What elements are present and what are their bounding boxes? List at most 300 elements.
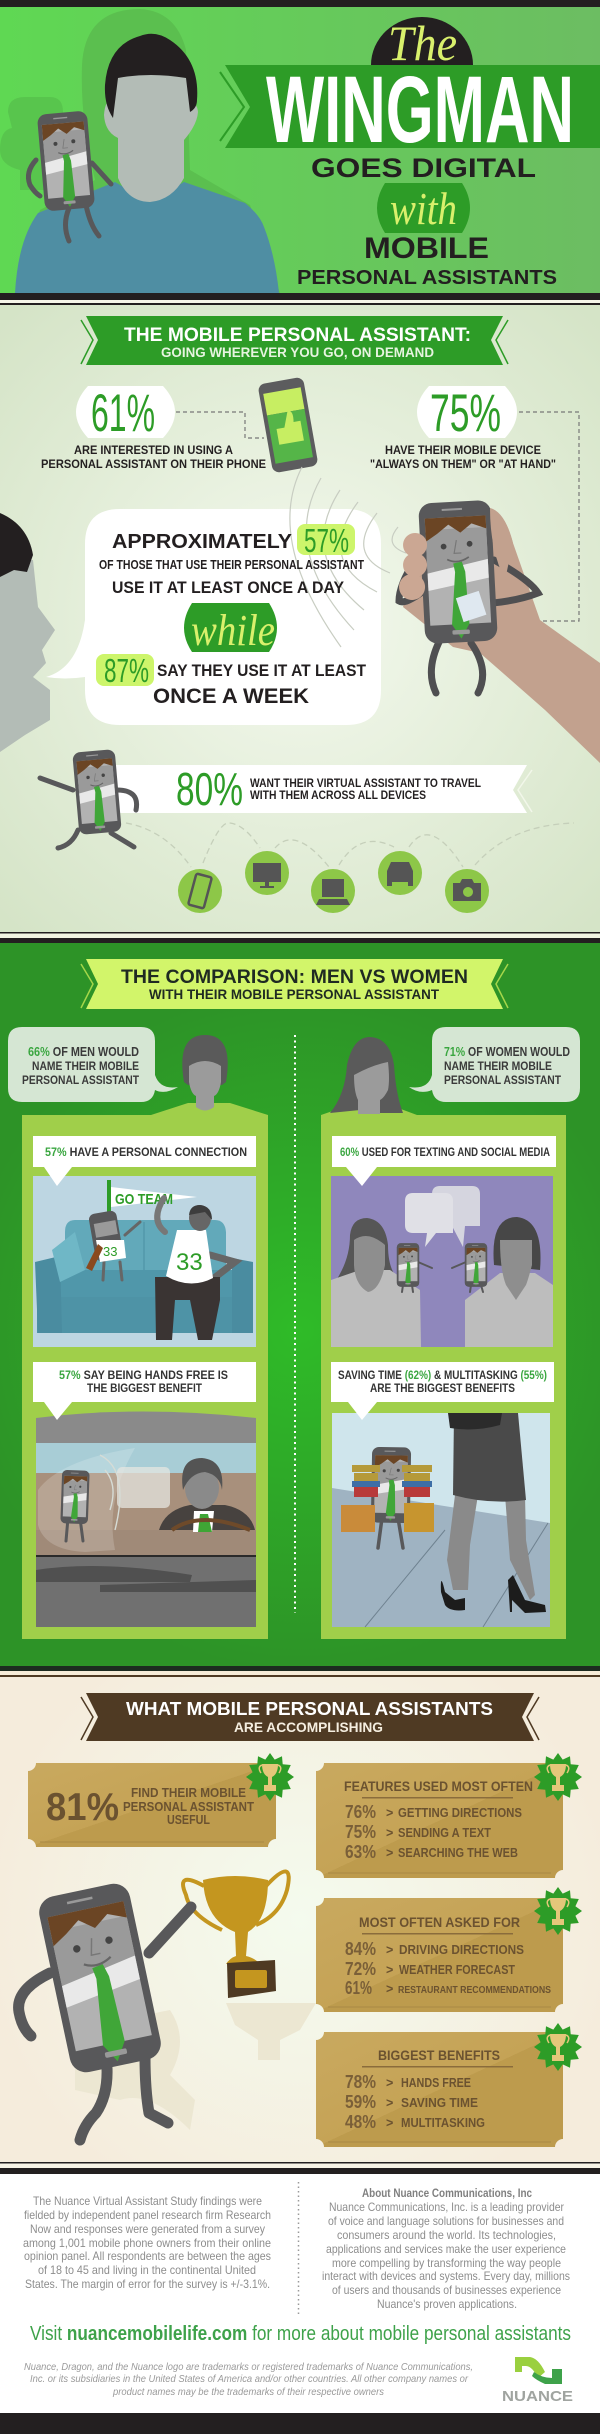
weather forecast: WEATHER FORECAST	[399, 1963, 515, 1977]
subheading: GOING WHEREVER YOU GO, ON DEMAND	[161, 344, 434, 360]
callout: texting	[332, 1136, 556, 1167]
couch back	[65, 1220, 226, 1275]
fingers	[399, 533, 427, 600]
pointer	[44, 1167, 72, 1186]
box	[332, 1136, 556, 1167]
pennant	[107, 1180, 197, 1215]
badge	[534, 2023, 582, 2071]
text: interested in assistant	[41, 443, 266, 471]
plaque: most often asked for	[316, 1887, 582, 2012]
dark stripe	[0, 1666, 600, 1671]
71% line: 71% OF WOMEN WOULD	[444, 1045, 570, 1059]
while pill	[184, 603, 277, 652]
bubble text	[22, 1045, 140, 1087]
pointer	[348, 1402, 377, 1420]
line 6: interact with devices and systems. Every day, millions	[322, 2269, 570, 2283]
approximately: APPROXIMATELY	[112, 531, 293, 553]
underline	[362, 1933, 513, 1934]
line 1: ARE INTERESTED IN USING A	[74, 443, 233, 457]
base plate	[235, 1970, 267, 1988]
notepad	[456, 591, 486, 622]
face	[354, 1236, 385, 1292]
driving directions: DRIVING DIRECTIONS	[399, 1943, 524, 1957]
driver suit	[159, 1505, 255, 1530]
title: BIGGEST BENEFITS	[378, 2047, 500, 2063]
line 5: opinion panel. All respondents are between the ages	[24, 2249, 271, 2263]
chevron: >	[386, 1943, 393, 1957]
line 2: WITH THEM ACROSS ALL DEVICES	[250, 788, 426, 802]
legs	[447, 1495, 535, 1600]
underline	[362, 1797, 513, 1798]
front bubble	[405, 1193, 453, 1247]
phone casing	[258, 377, 318, 473]
limbs	[399, 560, 538, 693]
footer divider	[298, 2182, 300, 2315]
heading: WHAT MOBILE PERSONAL ASSISTANTS	[126, 1698, 493, 1719]
brown stripe	[0, 1675, 600, 1677]
pointer	[346, 1167, 377, 1186]
head	[189, 1205, 211, 1231]
panel background	[22, 1103, 268, 1639]
steering wheel	[172, 1520, 250, 1530]
line 2: PERSONAL ASSISTANT	[123, 1800, 254, 1814]
heading banner	[86, 1693, 534, 1741]
box	[33, 1136, 256, 1167]
heading banner	[86, 316, 503, 365]
stat 61%: 61%	[91, 384, 155, 443]
plaque shape	[316, 2032, 563, 2147]
left books red	[354, 1487, 378, 1497]
face and neck	[354, 1062, 389, 1114]
heading chevrons	[81, 1697, 539, 1740]
jersey	[166, 1230, 213, 1284]
line 1: The Nuance Virtual Assistant Study findings were	[33, 2194, 262, 2208]
base	[227, 1960, 276, 1998]
badge	[246, 1753, 294, 1801]
phone	[60, 1470, 90, 1524]
number: 33	[176, 1249, 203, 1276]
glyph	[253, 863, 281, 888]
shoulder phone character	[28, 111, 111, 241]
speech bubble	[46, 509, 381, 725]
head in profile	[0, 513, 55, 752]
title: mobile: MOBILE	[364, 232, 489, 265]
hair	[330, 1037, 403, 1113]
box	[33, 1362, 256, 1402]
limbs	[103, 1222, 140, 1280]
title: FEATURES USED MOST OFTEN	[344, 1778, 533, 1794]
plaque inner line	[40, 1841, 264, 1843]
title: personal assistants: PERSONAL ASSISTANTS	[297, 267, 557, 289]
line 1: WANT THEIR VIRTUAL ASSISTANT TO TRAVEL	[250, 776, 481, 790]
woman legs	[441, 1413, 546, 1613]
line 1: HAVE THEIR MOBILE DEVICE	[385, 443, 541, 457]
hair	[0, 513, 33, 577]
line 2: NAME THEIR MOBILE	[32, 1059, 139, 1073]
cup	[203, 1876, 268, 1964]
icon: camera	[445, 869, 489, 913]
arm and palm	[403, 508, 600, 763]
87%: 87%	[104, 652, 149, 689]
line 4: among 1,001 mobile phone owners from their online	[23, 2236, 271, 2250]
left arm	[35, 1256, 62, 1333]
ribbon chevron	[518, 770, 532, 812]
left books blue and red	[352, 1481, 380, 1487]
line 3: Now and responses were generated from a survey	[30, 2222, 265, 2236]
75%: 75%	[345, 1822, 376, 1842]
with pill	[377, 183, 470, 233]
plaque shape	[316, 1898, 563, 2012]
label: GO TEAM	[115, 1191, 173, 1208]
plaque shape	[28, 1763, 276, 1847]
glyph	[316, 879, 350, 905]
line 2: ARE THE BIGGEST BENEFITS	[370, 1381, 515, 1395]
section background	[0, 1677, 600, 2163]
line 2: of voice and language solutions for businesses and	[328, 2214, 564, 2228]
phone shadow	[0, 97, 63, 190]
pole	[107, 1180, 111, 1215]
big phone character	[19, 1881, 191, 2140]
line 3: PERSONAL ASSISTANT	[444, 1073, 562, 1087]
dash detail	[36, 1566, 256, 1592]
signal glow	[38, 1448, 135, 1552]
hair	[182, 1035, 228, 1085]
illustration: couch scene	[33, 1167, 256, 1347]
stat 61% badge	[76, 386, 175, 438]
upper divider cream	[0, 300, 600, 303]
hair	[105, 34, 197, 118]
about text	[322, 2186, 570, 2311]
phone body	[72, 749, 122, 835]
badge	[534, 1887, 582, 1935]
wordmark: NUANCE	[502, 2388, 573, 2405]
line 1: 57% SAY BEING HANDS FREE IS	[59, 1368, 228, 1382]
plaque: 81% useful	[28, 1753, 294, 1847]
plaque inner line	[328, 2141, 551, 2143]
line 2: THE BIGGEST BENEFIT	[87, 1381, 203, 1395]
upper divider bands	[0, 293, 600, 305]
line 3: product names may be the trademarks of their respective owners	[112, 2386, 385, 2398]
chevron: >	[386, 2116, 393, 2130]
line 7: of users and thousands of businesses experience	[332, 2283, 561, 2297]
chevron: >	[386, 1982, 393, 1996]
84%: 84%	[345, 1939, 376, 1959]
left heel	[441, 1581, 465, 1610]
saving time: SAVING TIME	[401, 2096, 478, 2110]
trophy	[183, 1871, 289, 1998]
glyph	[188, 873, 212, 909]
heading chevrons	[81, 320, 508, 364]
phone top	[88, 1210, 124, 1262]
pavement	[332, 1488, 550, 1627]
sound waves	[290, 467, 406, 647]
trademark text	[24, 2361, 473, 2398]
background	[331, 1176, 553, 1347]
text: 57% HAVE A PERSONAL CONNECTION	[45, 1145, 247, 1159]
limbs	[40, 778, 137, 848]
right heel	[508, 1575, 546, 1613]
section: what assistants are accomplishing	[0, 1666, 600, 2163]
sending a text: SENDING A TEXT	[398, 1826, 491, 1840]
stat 80%: 80%	[176, 763, 243, 815]
body	[465, 1273, 553, 1347]
phone	[371, 1447, 411, 1523]
chevron: >	[386, 1963, 393, 1977]
lower stripes of previous section	[0, 932, 600, 943]
right books	[402, 1465, 432, 1481]
couch front	[37, 1297, 251, 1333]
panel background	[321, 1105, 566, 1639]
76%: 76%	[345, 1802, 376, 1822]
title: The: The	[388, 15, 457, 71]
line 4: applications and services make the user experience	[326, 2242, 566, 2256]
number: 33	[103, 1244, 117, 1259]
legs	[378, 1518, 403, 1548]
searching the web: SEARCHING THE WEB	[398, 1846, 518, 1860]
thumb	[274, 409, 304, 445]
illustration: shopping	[332, 1402, 550, 1627]
shadow of character and trophy	[75, 2003, 316, 2130]
phone	[397, 1243, 419, 1287]
legs	[66, 1518, 83, 1541]
right arm	[232, 1258, 253, 1333]
thumb tip	[490, 508, 513, 580]
plaque: biggest benefits	[316, 2023, 582, 2147]
connector dashes	[176, 412, 579, 621]
icon: thumbs up phone	[258, 377, 318, 473]
left books	[352, 1465, 380, 1481]
of those: OF THOSE THAT USE THEIR PERSONAL ASSISTANT	[99, 558, 364, 572]
running phone character	[40, 749, 137, 848]
hair	[189, 1205, 212, 1220]
line 3: USEFUL	[167, 1813, 210, 1827]
study text	[23, 2194, 271, 2291]
78%: 78%	[345, 2072, 376, 2092]
stat 75%: 75%	[430, 384, 501, 443]
bubble text	[444, 1045, 570, 1087]
limbs	[452, 1262, 483, 1292]
roof	[36, 1412, 256, 1445]
man shadow	[15, 9, 280, 293]
pavement lines	[365, 1523, 548, 1627]
plaque shape	[316, 1763, 563, 1878]
raised arm	[157, 1198, 165, 1232]
driver face	[185, 1467, 219, 1509]
hair	[335, 1218, 395, 1282]
59%: 59%	[345, 2092, 376, 2112]
line 6: of 18 to 45 and living in the continental United	[38, 2263, 256, 2277]
61%: 61%	[345, 1978, 372, 1998]
left bag	[341, 1505, 375, 1532]
phone body	[36, 1881, 164, 2075]
left phone	[397, 1243, 432, 1292]
plaque: features used most often	[316, 1753, 582, 1878]
pants	[155, 1277, 220, 1340]
phone body	[37, 111, 95, 211]
green screen	[267, 409, 313, 464]
hair	[493, 1217, 541, 1270]
right bag	[404, 1503, 434, 1532]
panel: women	[321, 1027, 580, 1639]
phone assistant	[60, 1470, 90, 1541]
line 3: consumers around the world. Its technologies,	[337, 2228, 556, 2242]
chevron: >	[386, 1846, 393, 1860]
dash line	[36, 1555, 256, 1557]
face	[94, 1220, 118, 1238]
lime screen top	[263, 387, 304, 415]
say they use: SAY THEY USE IT AT LEAST	[157, 661, 367, 680]
66% line: 66% OF MEN WOULD	[28, 1045, 139, 1059]
line 7: States. The margin of error for the survey is +/-3.1%.	[25, 2277, 270, 2291]
once a week: ONCE A WEEK	[153, 685, 309, 708]
title: MOST OFTEN ASKED FOR	[359, 1914, 520, 1930]
text: 60% USED FOR TEXTING AND SOCIAL MEDIA	[340, 1145, 550, 1159]
circle	[311, 869, 355, 913]
limbs	[402, 1262, 432, 1292]
callout: saving time	[331, 1362, 554, 1402]
subheading: WITH THEIR MOBILE PERSONAL ASSISTANT	[149, 986, 439, 1002]
seats	[36, 1473, 256, 1533]
right arm	[205, 1255, 235, 1285]
windshield	[36, 1443, 256, 1478]
while: while	[191, 606, 275, 655]
line 1: FIND THEIR MOBILE	[131, 1786, 246, 1800]
section: hero	[0, 0, 600, 293]
icon: smartphone	[178, 869, 222, 913]
section: the mobile personal assistant	[0, 293, 600, 938]
once a day: USE IT AT LEAST ONCE A DAY	[112, 578, 345, 597]
57%: 57%	[304, 522, 349, 559]
green shape	[532, 2369, 562, 2384]
jersey	[96, 1240, 126, 1262]
plaque inner line	[328, 2006, 551, 2008]
mirror	[117, 1467, 170, 1508]
illustration: women texting	[331, 1167, 553, 1347]
circle	[445, 869, 489, 913]
device hop path	[126, 823, 574, 867]
dashboard	[36, 1530, 256, 1558]
handbag	[448, 1413, 502, 1429]
callout: personal connection	[33, 1136, 256, 1167]
left woman	[331, 1218, 421, 1347]
glyph	[387, 862, 413, 886]
title: goes digital: GOES DIGITAL	[311, 153, 536, 183]
fan man	[155, 1198, 235, 1340]
stat 75% badge	[417, 386, 517, 438]
center divider	[294, 1035, 296, 1613]
line 2: "ALWAYS ON THEM" OR "AT HAND"	[370, 457, 556, 471]
banner chevron	[220, 72, 244, 141]
white background	[0, 2174, 600, 2413]
underline	[362, 2066, 513, 2068]
63%: 63%	[345, 1842, 376, 1862]
ribbon 80%	[115, 765, 527, 813]
subheading: ARE ACCOMPLISHING	[234, 1719, 383, 1735]
text: always at hand	[370, 443, 556, 471]
thick dark stripe	[0, 2168, 600, 2174]
section background	[0, 293, 600, 938]
shirt and tie	[193, 1511, 214, 1532]
plaque inner line	[328, 1872, 551, 1874]
box	[331, 1362, 554, 1402]
circle	[378, 851, 422, 895]
pillow	[52, 1232, 85, 1282]
man silhouette	[182, 1035, 228, 1110]
neck and face	[189, 1061, 221, 1110]
woman silhouette	[330, 1037, 403, 1114]
neck and face	[104, 68, 198, 202]
nuance logo	[502, 2357, 573, 2405]
bubble text	[96, 522, 367, 708]
chevron: >	[386, 1826, 393, 1840]
bubble	[8, 1027, 178, 1102]
circle	[245, 851, 289, 895]
lens and body	[453, 879, 481, 901]
hero background	[0, 7, 600, 293]
57% highlight	[297, 524, 355, 555]
back bubble	[432, 1186, 480, 1247]
thin dark stripe	[0, 2162, 600, 2164]
phone body	[418, 500, 498, 644]
man illustration	[15, 34, 279, 293]
lime shape	[515, 2357, 545, 2378]
line 8: Nuance's proven applications.	[377, 2297, 517, 2311]
face and neck	[500, 1240, 532, 1300]
87% highlight	[96, 654, 154, 686]
phone fan	[86, 1210, 140, 1280]
callout: hands free	[33, 1362, 256, 1402]
heading banner	[86, 959, 503, 1009]
line 2: fielded by independent panel research firm Research	[24, 2208, 271, 2222]
right woman	[465, 1217, 553, 1347]
cream stripe	[0, 2164, 600, 2168]
multitasking: MULTITASKING	[401, 2116, 485, 2130]
restaurant recommendations: RESTAURANT RECOMMENDATIONS	[398, 1984, 551, 1996]
hands free: HANDS FREE	[401, 2076, 471, 2090]
heading chevrons	[81, 964, 508, 1008]
line 1: Nuance, Dragon, and the Nuance logo are trademarks or registered trademarks of Nuance Communications,	[24, 2361, 473, 2373]
right phone	[452, 1243, 487, 1292]
text: across all devices	[250, 776, 481, 802]
line 1: SAVING TIME (62%) & MULTITASKING (55%)	[338, 1368, 547, 1382]
about title: About Nuance Communications, Inc	[362, 2186, 532, 2200]
couch seat	[52, 1270, 240, 1298]
driver hair	[182, 1458, 222, 1490]
cream stripe	[0, 934, 600, 938]
lens	[463, 887, 473, 897]
sky	[332, 1413, 550, 1627]
title: with: with	[390, 183, 457, 234]
line 1: Nuance Communications, Inc. is a leading provider	[329, 2200, 564, 2214]
phone with purchases	[341, 1447, 434, 1548]
right books red	[404, 1487, 430, 1497]
hand holding phone	[399, 500, 600, 763]
line 2: Inc. or its subsidiaries in the United States of America and/or other countries. All other company names or	[30, 2373, 468, 2385]
flag	[111, 1187, 197, 1207]
chevron: >	[386, 2096, 393, 2110]
right books blue	[402, 1481, 432, 1487]
bottom band	[0, 2413, 600, 2434]
line 3: PERSONAL ASSISTANT	[22, 1073, 140, 1087]
title banner	[225, 65, 600, 148]
icon: car	[378, 851, 422, 895]
line 2: NAME THEIR MOBILE	[444, 1059, 552, 1073]
section: comparison men vs women	[0, 932, 600, 1666]
panel: men	[8, 1027, 268, 1639]
48%: 48%	[345, 2112, 376, 2132]
bubble	[409, 1027, 580, 1102]
heading: THE COMPARISON: MEN VS WOMEN	[121, 967, 468, 988]
